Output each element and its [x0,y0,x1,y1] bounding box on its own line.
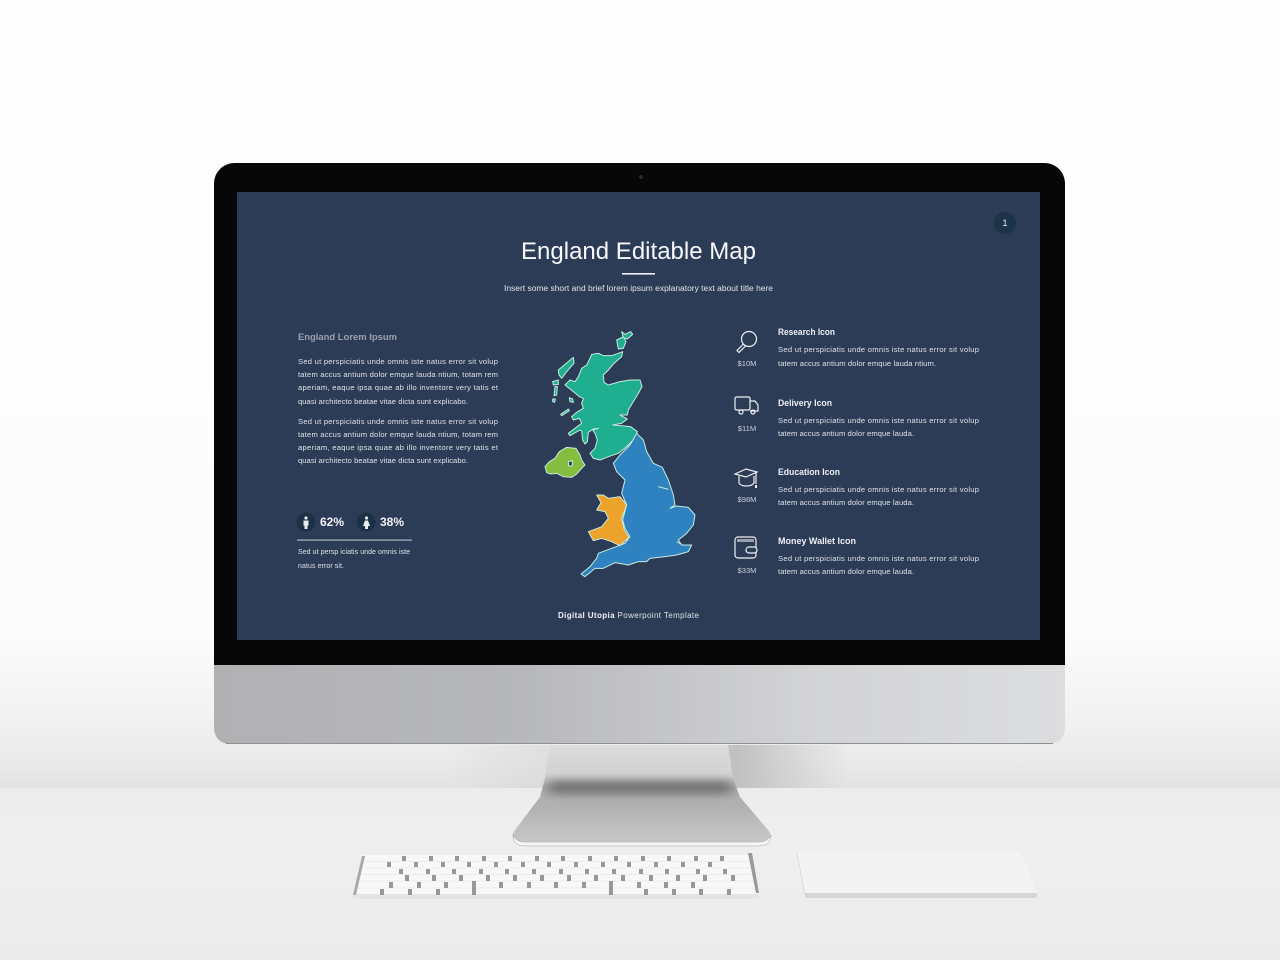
stats caption: Sed ut persp iciatis unde omnis iste [298,549,410,556]
description: research: Sed ut perspiciatis unde omnis iste natus error sit volup [778,345,979,354]
icon: wallet [735,537,757,558]
stats caption: natus error sit. [298,563,344,570]
description: research: tatem accus antium dolor emque lauda ntium. [778,359,936,368]
region: England [581,433,695,577]
trackpad [797,853,1037,898]
heading: delivery: Delivery Icon [778,398,832,408]
description: education: tatem accus antium dolor emque lauda. [778,498,914,507]
heading: education: Education Icon [778,467,840,477]
item: research [737,327,979,368]
paragraph two: quasi architecto beatae vitae dicta sunt explicabo. [298,456,468,465]
subtitle: Insert some short and brief lorem ipsum explanatory text about title here [504,284,774,293]
UK map [545,332,695,577]
region: Scotland [553,332,642,460]
description: money wallet: tatem accus antium dolor emque lauda. [778,567,914,576]
left text panel [298,332,499,465]
description: research [778,345,979,368]
description: money wallet [778,554,979,576]
item: education [735,467,979,507]
icon: male figure [296,512,316,532]
value: $98M: $98M [738,495,756,504]
footer text: Digital Utopia Powerpoint Template [558,611,700,620]
paragraph one: Sed ut perspiciatis unde omnis iste natus error sit volup [298,357,498,366]
heading: research: Research Icon [778,327,835,337]
value: $10M: $10M [738,359,756,368]
stat: 62%: 62% [320,515,344,529]
keyboard [353,853,759,899]
description: education [778,485,979,507]
paragraph two: Sed ut perspiciatis unde omnis iste natus error sit volup [298,417,498,426]
region: Northern Ireland [545,447,585,477]
gender statistics [296,512,412,570]
services list [735,327,979,576]
value: $11M: $11M [738,424,756,433]
paragraph two: aperiam, eaque ipsa quae ab illo inventore very tatis et [298,443,499,452]
description: delivery: tatem accus antium dolor emque lauda. [778,429,914,438]
description: money wallet: Sed ut perspiciatis unde omnis iste natus error sit volup [778,554,979,563]
monitor body [214,163,1065,744]
title: England Editable Map [521,238,756,265]
heading: money wallet: Money Wallet Icon [778,536,856,546]
title divider [622,273,655,275]
paragraph one: quasi architecto beatae vitae dicta sunt explicabo. [298,397,468,406]
stat: 38%: 38% [380,515,404,529]
item: money wallet [735,536,979,576]
description: education: Sed ut perspiciatis unde omnis iste natus error sit volup [778,485,979,494]
icon: magnifying glass [737,332,756,352]
slide screen [237,192,1040,640]
region: Wales [588,495,629,546]
paragraph one: aperiam, eaque ipsa quae ab illo inventore very tatis et [298,383,499,392]
left panel heading: England Lorem Ipsum [298,332,397,343]
icon: truck [735,397,758,414]
paragraph one [298,357,499,406]
page number badge: 1 [1002,218,1008,228]
value: $33M: $33M [738,566,756,575]
paragraph two: tatem accus antium dolor emque lauda ntium, totam rem [298,430,498,439]
paragraph one: tatem accus antium dolor emque lauda ntium, totam rem [298,370,498,379]
item: delivery [735,397,979,438]
monitor stand [513,745,771,846]
description: delivery [778,416,979,438]
page number badge [994,212,1016,234]
paragraph two [298,417,499,465]
stats divider [297,540,412,541]
description: delivery: Sed ut perspiciatis unde omnis iste natus error sit volup [778,416,979,425]
stats caption [298,549,410,570]
icon: female figure [356,512,376,532]
icon: graduation cap [735,469,757,488]
